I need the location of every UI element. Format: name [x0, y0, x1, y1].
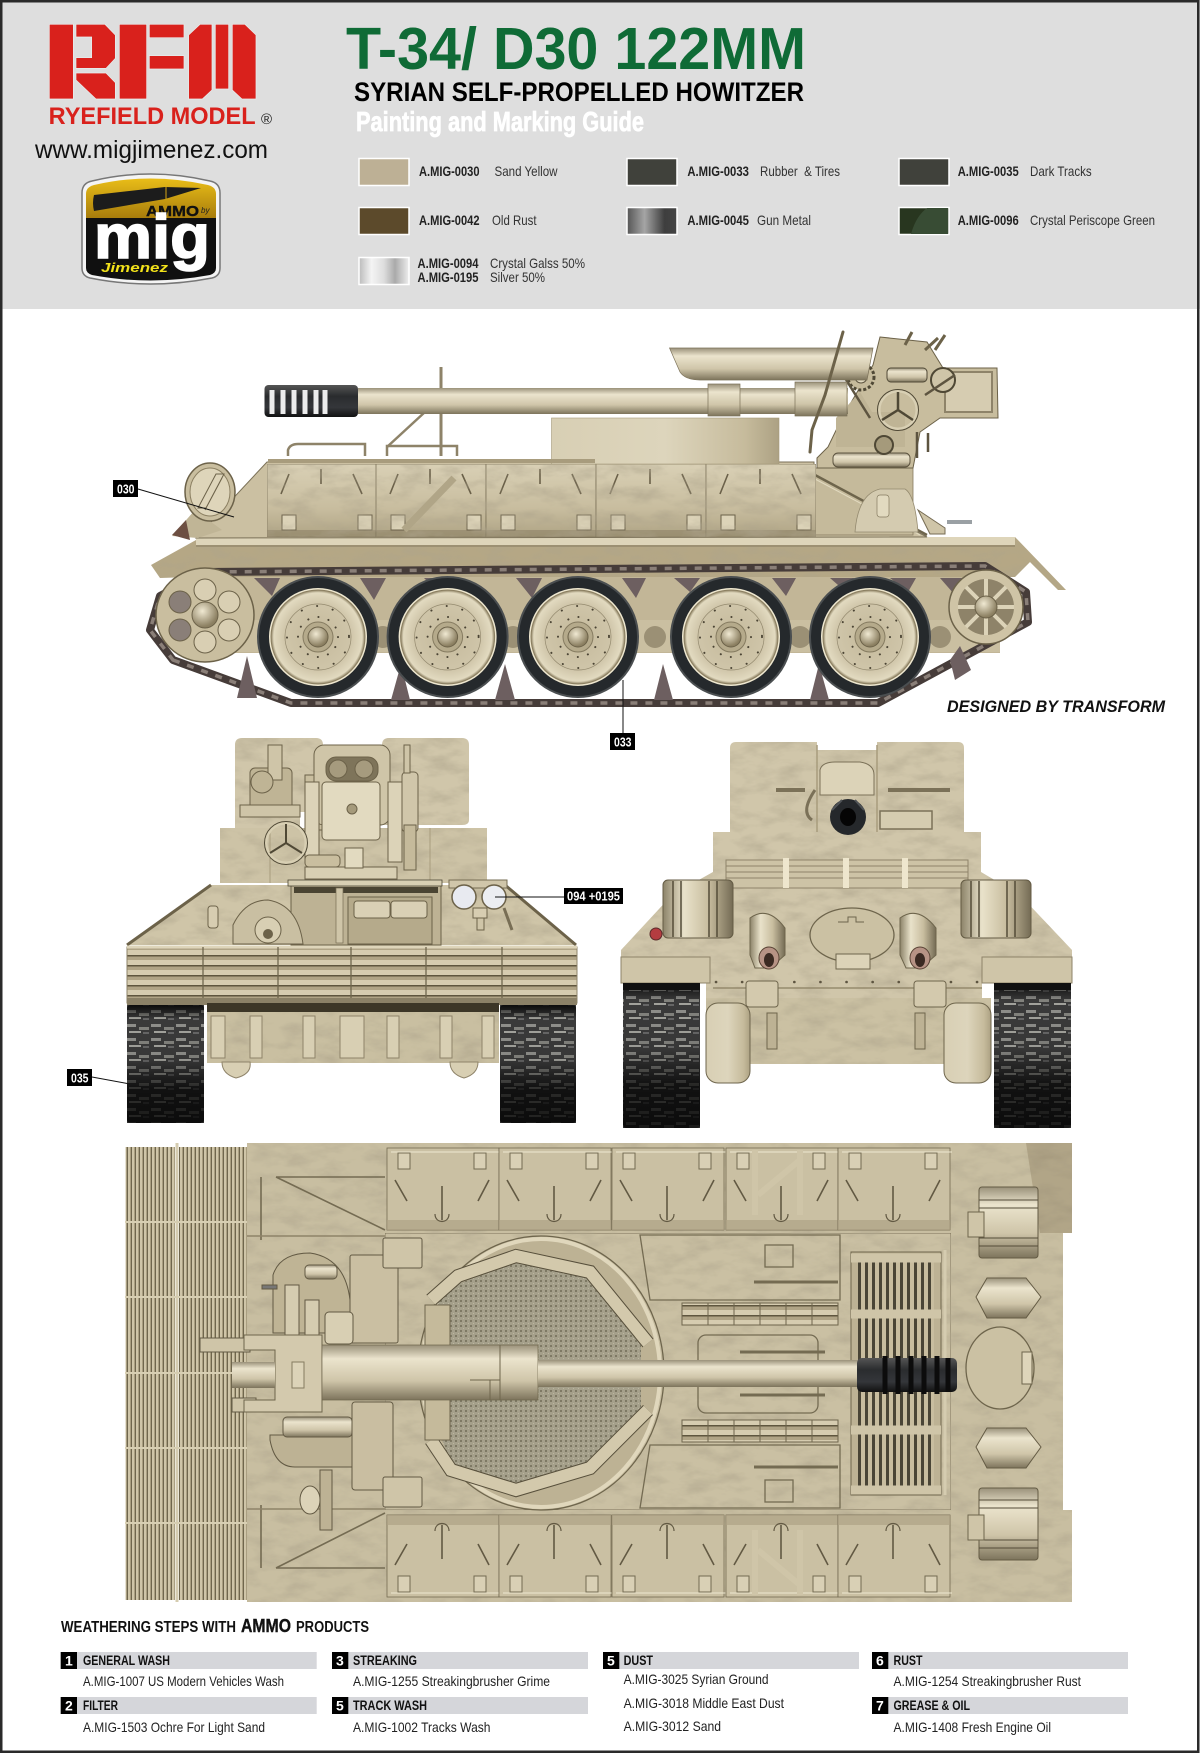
swatch: dark tracks	[899, 158, 1092, 186]
gun mount	[817, 332, 998, 468]
weathering heading	[61, 1616, 369, 1636]
step 7: grease and oil: GREASE & OIL	[894, 1698, 970, 1713]
headlight hatch	[810, 908, 894, 969]
step 2: filter: 2	[65, 1698, 73, 1714]
rivet line and hinges	[713, 981, 982, 1049]
swatch: sand yellow	[359, 158, 558, 186]
gun cradle	[670, 348, 873, 380]
callout: 033: 033	[614, 734, 632, 750]
step 5: dust: A.MIG-3018 Middle East Dust	[624, 1695, 784, 1711]
swatch: crystal glass and silver: Crystal Galss 50%	[490, 255, 585, 271]
swatch: crystal glass and silver: Silver 50%	[490, 269, 545, 285]
drive sprocket	[156, 568, 254, 662]
callout: 033	[610, 680, 635, 750]
step 1: general wash: GENERAL WASH	[83, 1653, 170, 1668]
swatch: dark tracks: A.MIG-0035	[958, 163, 1019, 179]
step 5: track wash	[332, 1697, 588, 1735]
front tracks	[623, 983, 1071, 1128]
swatch: gun metal	[627, 208, 811, 234]
step 6: rust: A.MIG-1254 Streakingbrusher Rust	[894, 1673, 1081, 1689]
panel: header	[0, 0, 1200, 309]
callout: 094 + 0195	[495, 888, 623, 904]
vehicle: rear view	[127, 738, 577, 1123]
front hull	[621, 742, 1072, 1064]
swatch: gun metal: Gun Metal	[757, 212, 811, 228]
turret mesh floor	[438, 1263, 641, 1483]
louvres	[682, 1303, 838, 1442]
designer credit: DESIGNED BY TRANSFORM	[947, 698, 1166, 716]
swatch: rubber and tires: Rubber & Tires	[760, 163, 840, 179]
rear hull	[127, 738, 576, 1063]
step 6: rust: RUST	[894, 1653, 923, 1668]
stowage boxes bottom row	[387, 1515, 952, 1597]
spare wheel	[208, 900, 303, 944]
step 7: grease and oil: A.MIG-1408 Fresh Engine Oil	[894, 1719, 1051, 1735]
logo: Ammo by Mig Jimenez badge: mig	[94, 203, 210, 272]
front fuel drums	[968, 1187, 1038, 1560]
vehicle: front view	[621, 742, 1072, 1128]
swatch: rubber and tires: A.MIG-0033	[687, 163, 749, 179]
track guide teeth	[237, 578, 971, 700]
step 1: general wash: 1	[65, 1652, 73, 1668]
step 2: filter: A.MIG-1503 Ochre For Light Sand	[83, 1719, 265, 1735]
muzzle brake	[857, 1356, 957, 1394]
step 3: streaking	[332, 1652, 588, 1689]
swatch: old rust: A.MIG-0042	[419, 212, 480, 228]
radiator grille	[851, 1250, 945, 1495]
step 5: dust: DUST	[624, 1653, 654, 1668]
shield mechanisms and breech	[240, 745, 418, 879]
step 7: grease and oil	[872, 1697, 1128, 1735]
logo: Ammo by Mig Jimenez badge: by	[201, 206, 210, 215]
step 6: rust: 6	[876, 1652, 884, 1668]
shield fittings	[776, 745, 950, 832]
logo: Ammo by Mig Jimenez badge: Jimenez	[101, 260, 169, 275]
weathering heading: AMMO	[241, 1616, 291, 1636]
step 3: streaking: A.MIG-1255 Streakingbrusher Grime	[353, 1673, 550, 1689]
swatch: crystal periscope green: Crystal Periscope Green	[1030, 212, 1155, 228]
weathering heading: WEATHERING STEPS WITH	[61, 1619, 236, 1636]
exhaust covers	[750, 913, 936, 969]
headlamps	[449, 880, 512, 930]
gun barrel	[538, 1360, 860, 1387]
gun mount mechanisms	[200, 1238, 422, 1530]
callout: 035	[67, 1069, 130, 1086]
fender tops	[621, 928, 1072, 983]
turret drum	[552, 418, 779, 464]
turret ring	[418, 1236, 664, 1510]
step 3: streaking: 3	[336, 1652, 344, 1668]
stowage boxes top row	[387, 1148, 952, 1230]
logo: Ammo by Mig Jimenez badge	[82, 174, 220, 284]
gun muzzle	[830, 799, 866, 835]
side hull and tracks	[150, 537, 1066, 703]
step 5: dust	[603, 1652, 859, 1734]
step 2: filter	[61, 1697, 317, 1735]
logo: RFM Ryefield Model: ®	[261, 111, 272, 128]
swatch: crystal periscope green	[899, 208, 1155, 234]
colour key	[359, 158, 1155, 285]
swatch: old rust	[359, 208, 537, 234]
gun breech	[232, 1335, 322, 1412]
logo: RFM Ryefield Model: RYEFIELD MODEL	[49, 103, 256, 130]
rear hatch drum	[172, 463, 235, 540]
final drives	[706, 1003, 991, 1083]
step 1: general wash: A.MIG-1007 US Modern Vehicles Wash	[83, 1673, 284, 1689]
gun cradle	[322, 1345, 538, 1400]
open hatch	[288, 880, 442, 945]
step 5: track wash: A.MIG-1002 Tracks Wash	[353, 1719, 490, 1735]
section heading: painting guide: Painting and Marking Guide	[356, 106, 644, 137]
front hatch	[966, 1327, 1034, 1409]
swatch: gun metal: A.MIG-0045	[687, 212, 749, 228]
idler wheel	[949, 570, 1023, 644]
mantlet	[820, 762, 874, 795]
swatch: sand yellow: A.MIG-0030	[419, 163, 480, 179]
muzzle brake	[264, 385, 358, 417]
callout: 094 + 0195: 094 +0195	[567, 888, 620, 904]
road wheels	[258, 577, 930, 697]
callout: 035: 035	[71, 1070, 88, 1086]
website url: www.migjimenez.com	[34, 136, 268, 164]
callout: 030: 030	[117, 482, 134, 496]
weathering heading: PRODUCTS	[296, 1619, 369, 1636]
title: T-34/ D30 122MM	[346, 16, 806, 82]
gun barrel	[358, 388, 848, 414]
swatch: crystal glass and silver	[359, 255, 585, 285]
rear grille	[127, 947, 577, 1012]
step 6: rust	[872, 1652, 1128, 1689]
step 5: dust: A.MIG-3012 Sand	[624, 1718, 721, 1734]
swatch: crystal glass and silver: A.MIG-0195	[418, 269, 479, 285]
swatch: crystal periscope green: A.MIG-0096	[958, 212, 1019, 228]
radiator cover	[726, 858, 968, 888]
logo: RFM Ryefield Model	[49, 24, 272, 130]
logo: Ammo by Mig Jimenez badge: AMMO	[146, 203, 199, 220]
step 5: dust: A.MIG-3025 Syrian Ground	[624, 1671, 769, 1687]
swatch: crystal glass and silver: A.MIG-0094	[418, 255, 479, 271]
sighting rod	[810, 332, 843, 452]
deck diagonals	[247, 1177, 385, 1568]
superstructure with stowage boxes	[196, 462, 972, 538]
swatch: old rust: Old Rust	[492, 212, 537, 228]
step 1: general wash	[61, 1652, 317, 1689]
lower rear plate details	[211, 1016, 494, 1078]
step 3: streaking: STREAKING	[353, 1653, 417, 1668]
subtitle: SYRIAN SELF-PROPELLED HOWITZER	[354, 77, 804, 107]
vehicle: side view	[150, 332, 1066, 703]
exhaust grilles	[125, 1143, 247, 1602]
step 5: track wash: 5	[336, 1698, 344, 1714]
step 5: dust: 5	[607, 1652, 615, 1668]
swatch: dark tracks: Dark Tracks	[1030, 163, 1092, 179]
section: weathering steps	[61, 1616, 1128, 1735]
exhaust housings	[976, 1278, 1041, 1468]
swatch: sand yellow: Sand Yellow	[494, 163, 558, 179]
central deck	[385, 1233, 951, 1510]
rails and mast	[268, 367, 595, 461]
callout: 030	[113, 480, 234, 517]
rear tracks	[127, 1005, 576, 1123]
engine deck panels	[640, 1235, 840, 1508]
vehicle: top view	[125, 1143, 1072, 1602]
step 2: filter: FILTER	[83, 1698, 118, 1713]
fuel drums	[663, 880, 1031, 938]
step 5: track wash: TRACK WASH	[353, 1698, 427, 1713]
step 7: grease and oil: 7	[876, 1698, 884, 1714]
dark track gaps	[623, 983, 1071, 990]
swatch: rubber and tires	[627, 158, 840, 186]
recoil sleeves	[708, 382, 847, 416]
top view hull	[247, 1143, 1072, 1602]
